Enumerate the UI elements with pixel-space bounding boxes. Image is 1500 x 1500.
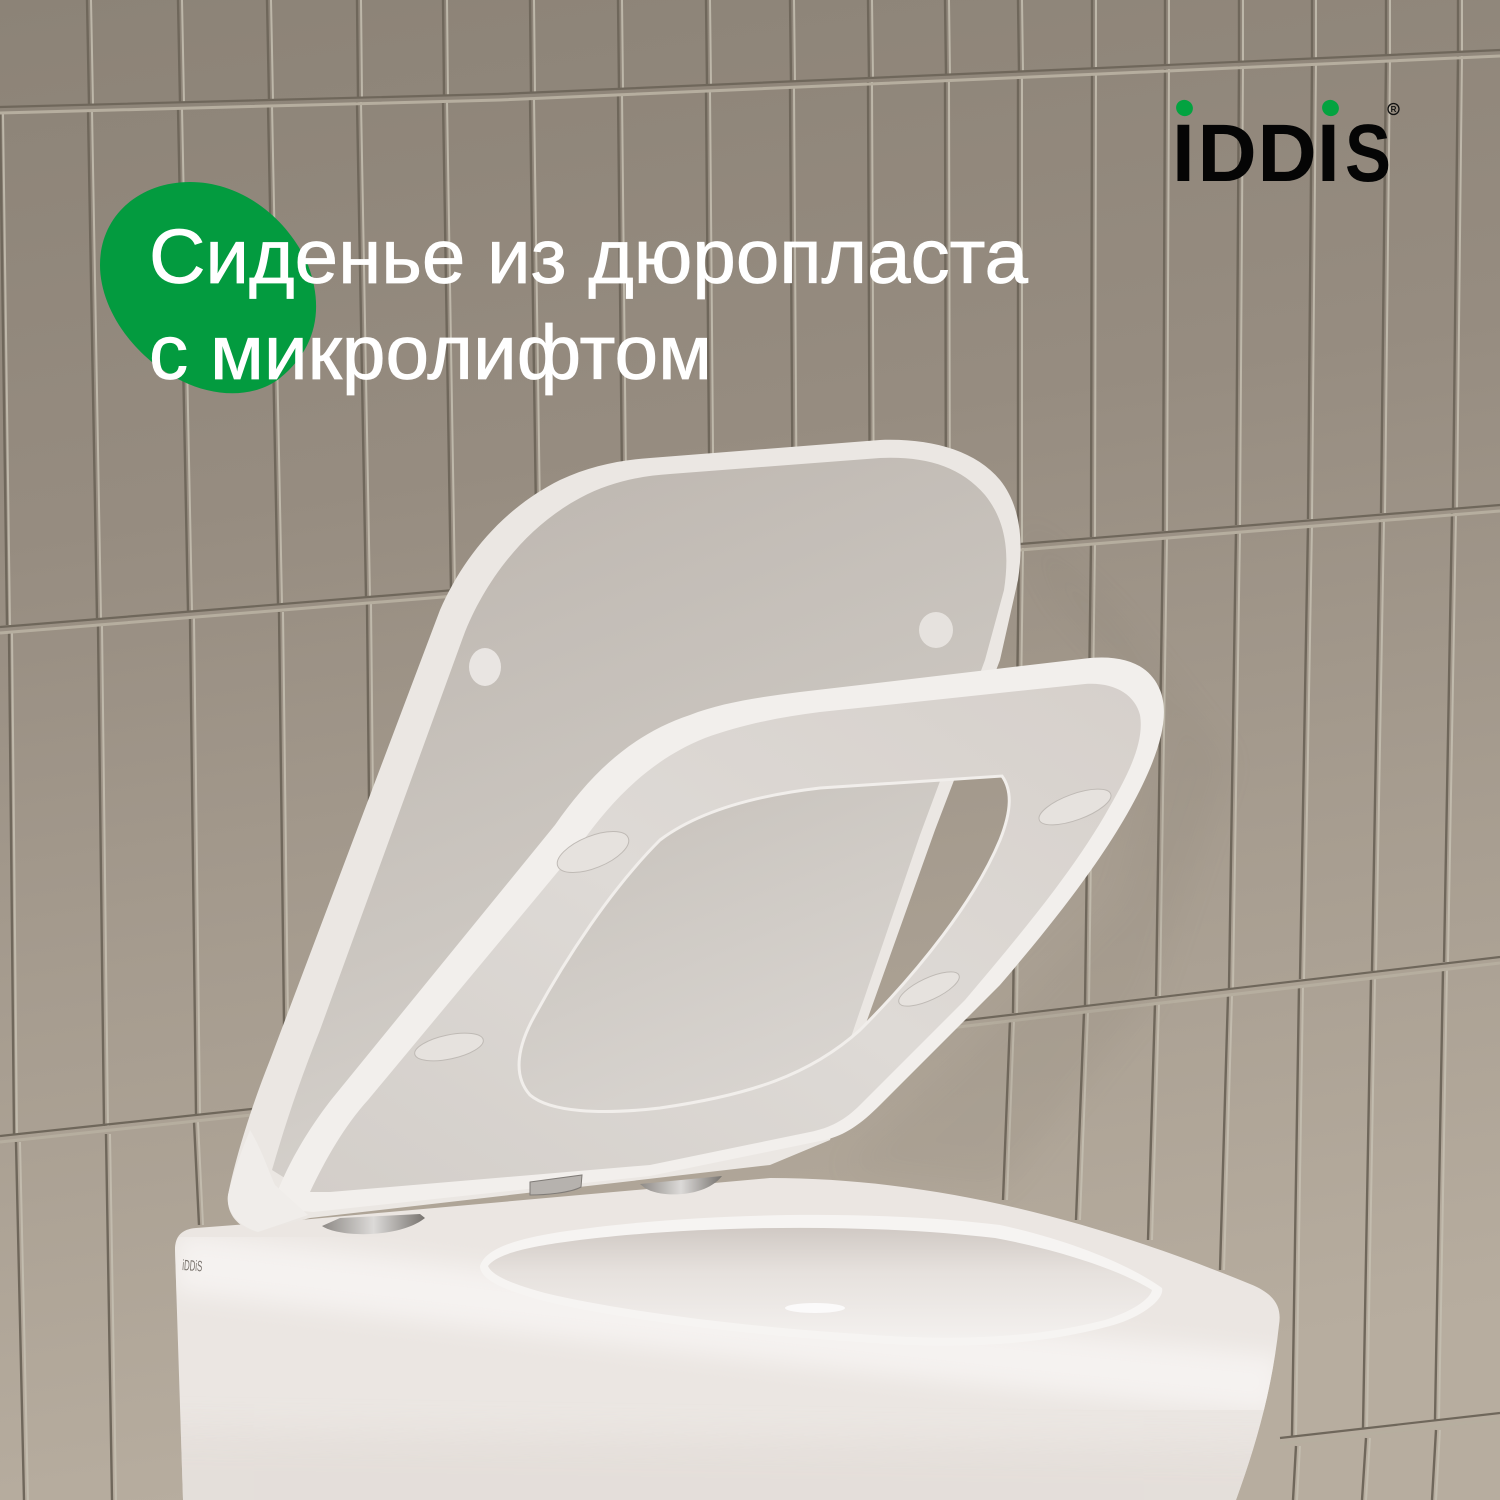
logo: IDDIS: S [1345,108,1391,199]
toilet bowl body [175,1178,1280,1500]
ridge around seat opening [519,776,1009,1112]
lid [228,440,1021,1232]
seat underside face [310,684,1141,1192]
hinges [322,1176,722,1234]
title: Сиденье из дюропласта [149,214,1028,300]
bowl opening [480,1215,1162,1346]
logo: IDDIS: IDDI [1172,108,1340,199]
lid inner face [272,458,1006,1200]
shadow cast by lid on wall [840,520,1230,1190]
lid bumper right [919,612,953,648]
hinge end of lid [228,1130,308,1232]
lid bumper left [469,648,501,686]
toilet seat [272,657,1164,1212]
soft highlight along the front edge [175,1238,1275,1462]
logo: IDDIS [1172,97,1399,199]
seat bumpers [412,782,1115,1066]
logo: IDDIS: R [1391,105,1397,114]
small logo on ceramic: iDDiS [182,1257,203,1275]
green blob [100,182,316,393]
quick release plate [530,1175,582,1195]
title: с микролифтом [149,310,712,396]
title [149,214,1028,396]
